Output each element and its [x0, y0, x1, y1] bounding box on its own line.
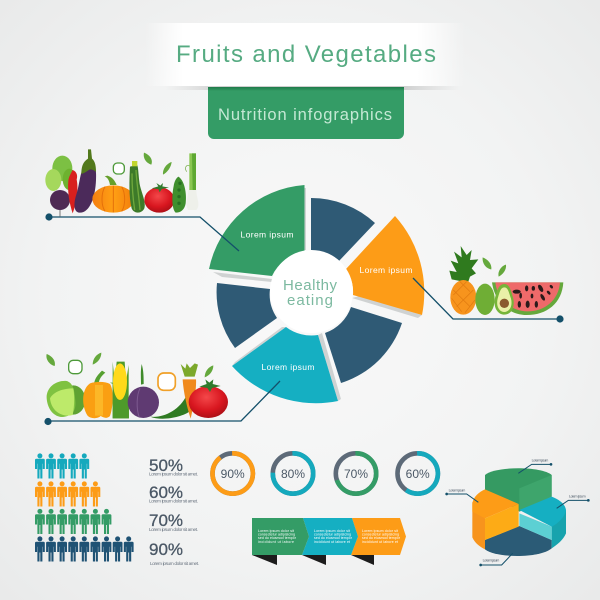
- donut 70%: 70%: [344, 467, 368, 481]
- ribbon text: Lorem ipsum dolor sit: [258, 529, 294, 533]
- ribbon step: green: [252, 518, 309, 555]
- pie labels: [449, 459, 586, 563]
- donut 80%: [273, 453, 313, 494]
- donut 60%: 60%: [406, 467, 430, 481]
- segment: green: [209, 185, 304, 276]
- percentage labels: [149, 456, 199, 567]
- percentage labels: 50%: [149, 456, 183, 475]
- pineapple: [449, 246, 478, 282]
- percentage labels: Lorem ipsum dolor sit amet.: [149, 527, 198, 533]
- ribbon text: consectetur adipisicing: [362, 532, 399, 536]
- watermelon: [492, 282, 563, 315]
- percentage labels: 70%: [149, 511, 183, 530]
- greens: [52, 156, 72, 181]
- avocado half: [495, 284, 514, 315]
- donut 90%: 90%: [221, 467, 245, 481]
- title panel: [145, 23, 465, 86]
- ribbon text: sed do eiusmod tempor: [362, 536, 401, 540]
- ribbon text: consectetur adipisicing: [258, 532, 295, 536]
- navy slice: [485, 526, 552, 556]
- ribbon text: sed do eiusmod tempor: [258, 536, 297, 540]
- title: Fruits and Vegetables: [176, 41, 436, 68]
- row: green 70%: [35, 509, 111, 534]
- donut 60%: [398, 453, 438, 494]
- arrow ribbon: [252, 518, 406, 565]
- percentage labels: Lorem ipsum dolor sit amet.: [149, 498, 198, 504]
- vegetables group top: [45, 149, 198, 217]
- segment: teal: Lorem ipsum: [262, 362, 314, 372]
- ribbon step: teal: [302, 518, 358, 555]
- vegetables group bottom: [46, 353, 228, 419]
- percentage labels: 90%: [149, 540, 183, 559]
- green slice: [485, 468, 552, 512]
- wheel chart: [209, 185, 424, 403]
- segment: teal: [232, 327, 338, 403]
- subtitle panel: [208, 87, 404, 139]
- wheel hub: Healthy: [283, 277, 338, 294]
- wheel shadows: [213, 188, 422, 401]
- segment: navy right: [325, 307, 402, 383]
- avocado whole: [475, 284, 495, 315]
- pie callouts: [446, 464, 588, 565]
- ribbon text: incididunt ut labore: [258, 540, 294, 544]
- wheel hub: eating: [287, 292, 333, 309]
- donut 90%: [212, 453, 253, 494]
- title ribbon shadow: [165, 86, 460, 90]
- row: orange 60%: [35, 481, 100, 506]
- pie labels: Lorem ipsum: [569, 495, 586, 499]
- ribbon text: incididunt ut labore et: [314, 540, 350, 544]
- row: navy 90%: [35, 536, 134, 562]
- ribbon folds: [252, 555, 374, 565]
- segment: orange: [346, 216, 424, 315]
- people chart: [35, 453, 134, 562]
- donut charts: [212, 453, 438, 494]
- segment: navy top: [311, 198, 375, 261]
- ribbon text: sed do eiusmod tempor: [314, 536, 353, 540]
- connector dots: [44, 213, 564, 425]
- pie labels: Lorem ipsum: [532, 459, 548, 463]
- ribbon text: Lorem ipsum dolor sit: [362, 529, 398, 533]
- orange slice: [472, 489, 519, 549]
- ribbon text: incididunt ut labore et: [362, 540, 398, 544]
- fruits group: [449, 246, 563, 315]
- lettuce: [61, 385, 85, 415]
- ribbon text: Lorem ipsum dolor sit: [314, 529, 350, 533]
- pie labels: Lorem ipsum: [449, 488, 465, 492]
- pie labels: Lorem ipsum: [483, 559, 499, 563]
- teal slice: [519, 497, 566, 548]
- segment: orange: Lorem ipsum: [360, 265, 412, 275]
- donut 70%: [336, 453, 376, 494]
- percentage labels: Lorem ipsum dolor sit amet.: [150, 561, 199, 567]
- ribbon text: [258, 529, 401, 544]
- wheel hub: [270, 250, 353, 333]
- percentage labels: Lorem ipsum dolor sit amet.: [149, 472, 198, 478]
- donut 80%: 80%: [281, 467, 305, 481]
- segment: navy left: [217, 283, 277, 348]
- connector lines: [48, 217, 560, 421]
- row: teal 50%: [35, 453, 89, 478]
- percentage labels: 60%: [149, 483, 183, 502]
- subtitle: Nutrition infographics: [218, 106, 392, 124]
- ribbon text: consectetur adipisicing: [314, 532, 351, 536]
- 3d pie chart: [445, 459, 590, 566]
- ribbon step: orange: [351, 518, 406, 555]
- segment: green: Lorem ipsum: [240, 230, 294, 240]
